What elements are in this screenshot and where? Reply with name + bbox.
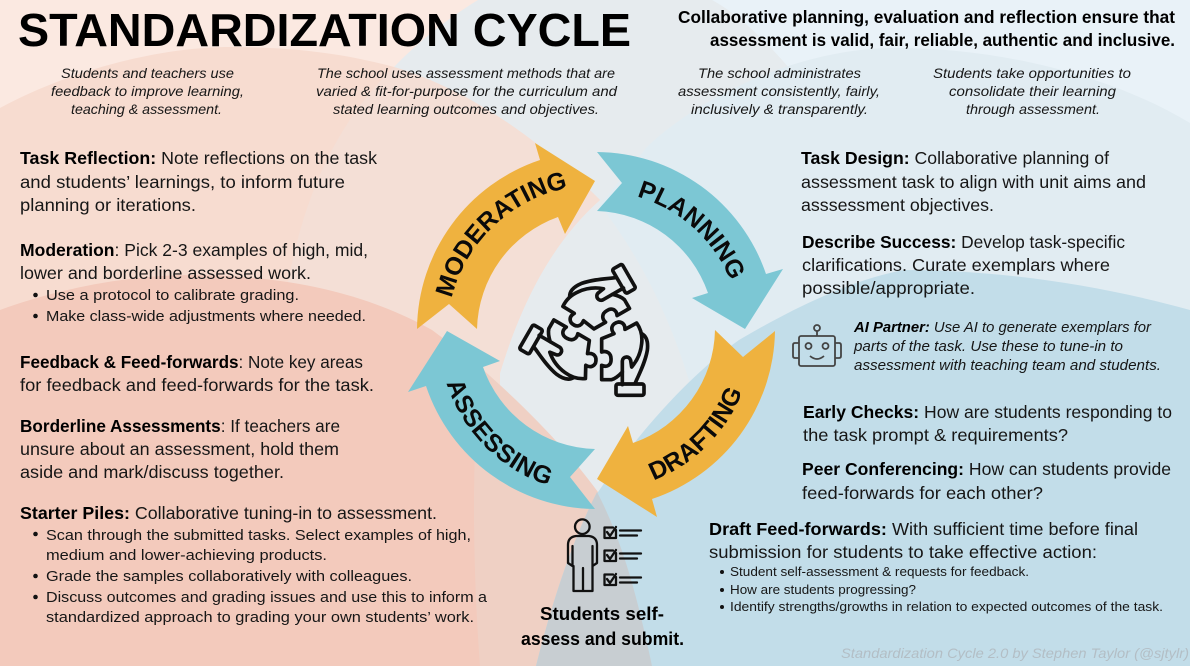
arrow: drafting <box>597 330 775 517</box>
right panel: peer conferencing: feed-forwards for each other? <box>802 483 1043 503</box>
intro: students and teachers: teaching & assessment. <box>71 101 222 117</box>
right panel: describe success: clarifications. Curate exemplars where <box>802 255 1110 275</box>
left panel: borderline assessments: unsure about an assessment, hold them <box>20 439 339 459</box>
intro: students take opportunities: consolidate their learning <box>949 83 1116 99</box>
arrow: drafting: DRAFTING <box>648 388 740 480</box>
right panel: draft feed-forwards <box>709 519 1163 614</box>
caption: students self-assess and submit: assess and submit. <box>521 628 684 649</box>
right panel: draft feed-forwards: Draft Feed-forwards: With sufficient time before final <box>709 519 1138 539</box>
icon: hands holding puzzle pieces <box>517 261 648 395</box>
right panel: peer conferencing <box>802 459 1171 503</box>
right panel: task design <box>801 148 1146 215</box>
left panel: feedback and feed-forwards: for feedback and feed-forwards for the task. <box>20 375 374 395</box>
left panel: task reflection <box>20 148 377 215</box>
left panel: feedback and feed-forwards: Feedback & Feed-forwards: Note key areas <box>20 352 363 372</box>
right panel: describe success <box>802 232 1125 298</box>
right panel: describe success: Describe Success: Develop task-specific <box>802 232 1125 252</box>
left panel: moderation: lower and borderline assessed work. <box>20 263 311 283</box>
left panel: starter piles: Scan through the submitted tasks. Select examples of high, <box>46 527 471 544</box>
intro: the school administrates: The school administrates <box>698 65 861 81</box>
left panel: moderation <box>20 240 368 325</box>
left panel: moderation: Make class-wide adjustments where needed. <box>46 308 366 325</box>
left panel: task reflection: and students’ learnings, to inform future <box>20 172 345 192</box>
arrow: assessing: ASSESSING <box>446 383 552 484</box>
caption: students self-assess and submit: Students self- <box>540 603 664 624</box>
credit line: Standardization Cycle 2.0 by Stephen Taylor (@sjtylr) <box>841 645 1189 661</box>
right panel: draft feed-forwards: submission for students to take effective action: <box>709 542 1097 562</box>
right panel: describe success: possible/appropriate. <box>802 278 975 298</box>
headline statement: Collaborative planning, evaluation and reflection ensure that <box>678 7 1175 27</box>
left panel: moderation: Moderation: Pick 2-3 examples of high, mid, <box>20 240 368 260</box>
intro: the school uses: varied & fit-for-purpose for the curriculum and <box>316 83 618 99</box>
callout: AI partner: parts of the task. Use these to tune-in to <box>853 339 1123 355</box>
arrow: planning <box>597 152 783 329</box>
right panel: draft feed-forwards: Student self-assessment & requests for feedback. <box>730 564 1029 579</box>
left panel: starter piles: Discuss outcomes and grading issues and use this to inform a <box>46 589 488 606</box>
right panel: draft feed-forwards: Identify strengths/growths in relation to expected outcomes of the task. <box>730 599 1163 614</box>
intro: the school uses: stated learning outcomes and objectives. <box>333 101 599 117</box>
intro: students and teachers: feedback to improve learning, <box>51 83 244 99</box>
right panel: task design: assessment task to align with unit aims and <box>801 172 1146 192</box>
intro: students take opportunities: through assessment. <box>966 101 1100 117</box>
arrow: moderating: MODERATING <box>435 172 566 297</box>
intro: students take opportunities <box>933 65 1131 117</box>
left panel: task reflection: Task Reflection: Note reflections on the task <box>20 148 377 168</box>
left panel: starter piles <box>20 503 488 626</box>
headline statement <box>678 7 1175 50</box>
icon: robot <box>793 325 841 366</box>
left panel: starter piles: standardized approach to grading your own students’ work. <box>46 609 474 626</box>
left panel: borderline assessments <box>20 416 340 482</box>
right panel: early checks: the task prompt & requirements? <box>803 425 1068 445</box>
intro: students and teachers <box>51 65 244 117</box>
right panel: early checks <box>803 402 1172 445</box>
arrow: assessing <box>408 331 595 509</box>
headline statement: assessment is valid, fair, reliable, authentic and inclusive. <box>710 30 1175 50</box>
right panel: peer conferencing: Peer Conferencing: How can students provide <box>802 459 1171 479</box>
left panel: feedback and feed-forwards <box>20 352 374 395</box>
left panel: starter piles: medium and lower-achieving products. <box>46 547 327 564</box>
left panel: borderline assessments: Borderline Assessments: If teachers are <box>20 416 340 436</box>
title: STANDARDIZATION CYCLE <box>18 4 631 56</box>
intro: the school administrates <box>678 65 880 117</box>
intro: the school administrates: assessment consistently, fairly, <box>678 83 880 99</box>
callout: AI partner: assessment with teaching team and students. <box>854 358 1161 374</box>
intro: the school administrates: inclusively & transparently. <box>691 101 868 117</box>
left panel: starter piles: Starter Piles: Collaborative tuning-in to assessment. <box>20 503 437 523</box>
intro: the school uses: The school uses assessment methods that are <box>317 65 615 81</box>
right panel: early checks: Early Checks: How are students responding to <box>803 402 1172 422</box>
callout: AI partner: AI Partner: Use AI to generate exemplars for <box>853 320 1152 336</box>
left panel: borderline assessments: aside and mark/discuss together. <box>20 462 284 482</box>
arrow: moderating <box>417 143 595 329</box>
left panel: starter piles: Grade the samples collaboratively with colleagues. <box>46 568 412 585</box>
arrow: planning: PLANNING <box>638 180 744 278</box>
right panel: draft feed-forwards: How are students progressing? <box>730 582 916 597</box>
caption: students self-assess and submit <box>521 603 684 649</box>
intro: students take opportunities: Students take opportunities to <box>933 65 1131 81</box>
right panel: task design: Task Design: Collaborative planning of <box>801 148 1109 168</box>
callout: AI partner <box>853 320 1161 374</box>
left panel: task reflection: planning or iterations. <box>20 195 196 215</box>
right panel: task design: asssessment objectives. <box>801 195 994 215</box>
icon: student with checklist <box>568 519 641 591</box>
intro: students and teachers: Students and teachers use <box>61 65 234 81</box>
intro: the school uses <box>316 65 618 117</box>
left panel: moderation: Use a protocol to calibrate grading. <box>46 287 299 304</box>
